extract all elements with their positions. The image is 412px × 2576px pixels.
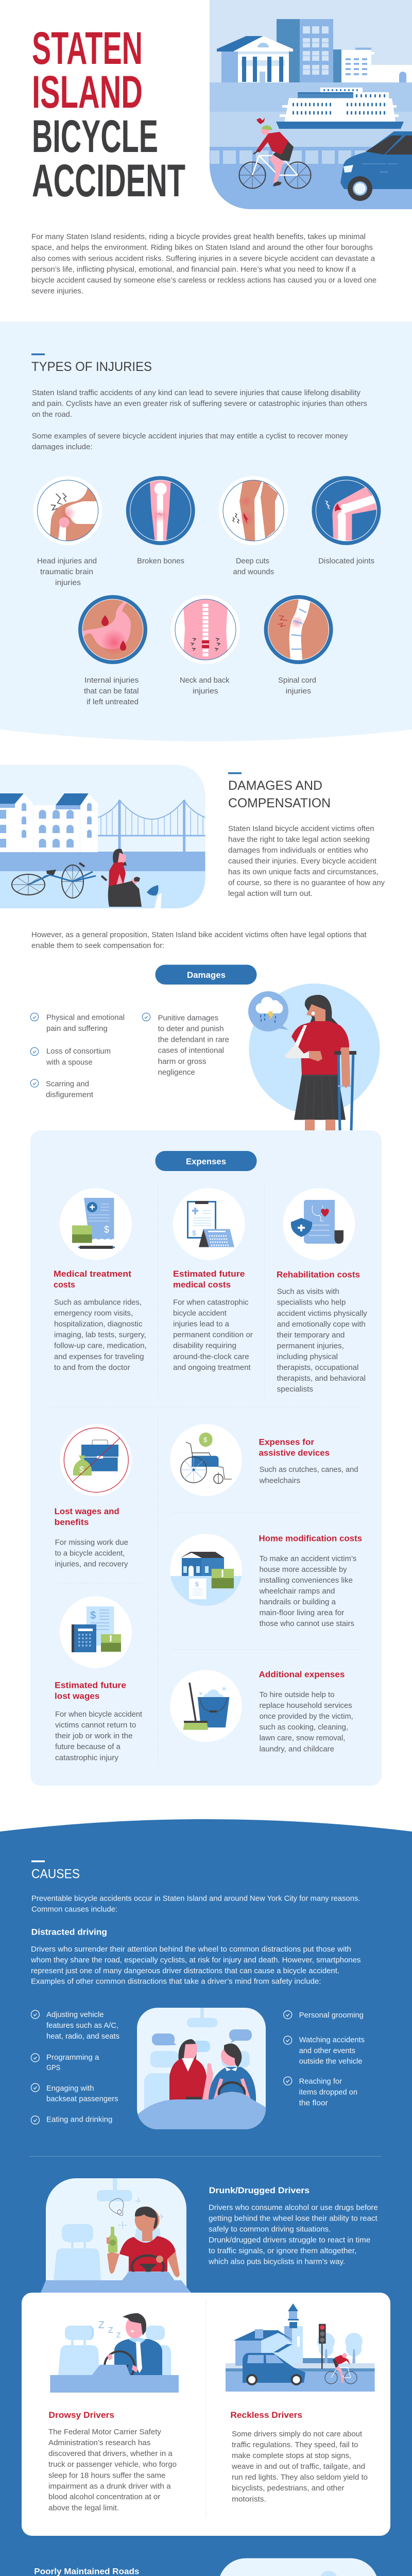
illustration: distracted car interior [137,2008,266,2129]
text block: distracted driving: Distracted driving [31,1927,107,1937]
panel: expenses [30,1130,382,1786]
text block: reckless drivers [230,2410,368,2503]
text block: drowsy drivers: Administration’s research has [48,2438,150,2447]
text: expenses for assistive devices [259,1437,358,1485]
heading: types of injuries [31,353,152,374]
labels: first row: and wounds [233,568,274,577]
text: medical treatment costs: to and from the doctor [54,1363,130,1372]
labels: first row [37,556,374,587]
text block: drunk/drugged drivers: getting behind the wheel lose their ability to react [209,2214,378,2223]
text: additional expenses: once provided by the victim, [260,1712,353,1721]
title: STATEN [32,22,143,74]
text: expenses for assistive devices: assistive devices [259,1448,330,1458]
list: damages left column: Loss of consortium [46,1047,111,1056]
text: lost wages and benefits: benefits [55,1517,89,1527]
list: damages right column: to deter and punish [158,1025,224,1033]
text block: distracted driving: Examples of other common distractions that take a driver’s mind from safety include: [31,1977,321,1986]
heading: damages and compensation [228,772,331,810]
icon: clipboard and calendar: $ [192,1229,196,1237]
text block: damages intro: Staten Island bicycle accident victims often [228,824,374,833]
list: distractions right [284,2011,365,2107]
text: home modification costs: wheelchair ramps and [259,1587,335,1596]
intro paragraph: also comes with serious accident risks. Suffering injuries in a severe bicycle accident can devastate a [31,255,375,263]
intro paragraph [31,232,376,296]
icon: broken bones [126,476,195,545]
text block: damages intro: damages from individuals or entities who [228,846,368,855]
text block: drowsy drivers: sleep for 18 hours suffer the same [48,2471,165,2480]
text: medical treatment costs: Such as ambulance rides, [54,1298,142,1307]
list: damages right column: the defendant in rare [158,1036,229,1044]
zzz: Z [108,2326,113,2335]
illustration: reckless driving street scene [226,2303,375,2392]
icon: trees [317,2333,363,2363]
hero illustration: city, ferry, cyclist and car [210,0,412,209]
list: distractions left: GPS [46,2063,60,2072]
icon: thought bubble with storm cloud [248,991,288,1031]
heading: causes: CAUSES [31,1867,80,1882]
text block: drunk/drugged drivers: Drivers who consume alcohol or use drugs before [209,2203,378,2212]
text block: causes intro [31,1894,360,1913]
text block: drunk/drugged drivers: to traffic signals, or ignore them altogether, [209,2246,356,2255]
list: damages right column: Punitive damages [158,1014,218,1022]
text: estimated future medical costs: For when catastrophic [173,1298,249,1307]
text block: drunk/drugged drivers [208,2185,378,2266]
icon: cyclist [239,117,311,189]
text: estimated future lost wages [55,1681,143,1762]
icon: head injury [33,476,104,547]
list: damages left column [30,1013,125,1099]
icon: spinal cord [264,595,333,664]
zzz [98,2320,121,2339]
icon: tower [277,19,341,82]
text: additional expenses: replace household services [260,1701,352,1710]
text block: drunk/drugged drivers: which also puts bicyclists in harm’s way. [208,2258,345,2266]
text: home modification costs [259,1533,362,1628]
text block: causes intro: Common causes include: [31,1905,117,1913]
heading: causes [31,1860,80,1882]
text: rehabilitation costs: Such as visits with [277,1287,339,1296]
panel: causes [0,1819,412,2576]
list: damages left column: with a spouse [46,1058,93,1066]
title: ACCIDENT [32,155,185,206]
list: damages left column: disfigurement [46,1091,94,1099]
text: rehabilitation costs: specialists who help [277,1298,346,1307]
icon: medical bill [60,1188,132,1260]
text block: injuries intro: damages include: [32,443,93,451]
text: lost wages and benefits: to a bicycle accident, [55,1549,125,1558]
pill: expenses: Expenses [186,1157,226,1166]
icon: rehabilitation report and shield [283,1188,355,1260]
labels: first row: traumatic brain [40,568,93,577]
list: damages right column: harm or gross [158,1057,207,1066]
intro paragraph: For many Staten Island residents, riding a bicycle provides great health benefits, takes up minimal [31,232,366,241]
text: home modification costs: main-floor living area for [260,1608,344,1617]
pill: expenses [156,1151,256,1171]
text: home modification costs: those who cannot use stairs [260,1619,354,1628]
icon: church tower and house [233,2303,303,2366]
text: rehabilitation costs: therapists, occupational [277,1363,358,1372]
icon: small blue car [243,2353,305,2385]
intro paragraph: space, and helps the environment. Riding bikes on Staten Island and around the other four boroughs [31,243,373,252]
text block: drowsy drivers: blood alcohol concentration at or [48,2493,160,2501]
text block: causes intro: Preventable bicycle accidents occur in Staten Island and around New York City for many reasons. [31,1894,360,1903]
text block: reckless drivers: Some drivers simply do not care about [232,2430,363,2438]
icon: tree [320,2571,337,2576]
icon: dislocated joints [312,476,381,545]
list: distractions right: items dropped on [299,2088,357,2097]
text block: reckless drivers: motorists. [232,2495,266,2503]
text block: drowsy drivers: Drowsy Drivers [48,2410,114,2420]
text: estimated future medical costs: injuries lead to a [173,1320,230,1328]
text: rehabilitation costs: their temporary and [277,1331,345,1340]
text: estimated future lost wages: lost wages [55,1691,99,1701]
text block: injuries intro: and pain. Cyclists have an even greater risk of suffering severe or catastrophic injuries than others [32,399,367,408]
labels: first row: Broken bones [137,556,184,566]
icon: driver [209,2043,256,2102]
text: expenses for assistive devices: Expenses for [259,1437,314,1447]
text: additional expenses: To hire outside help to [260,1690,335,1699]
text: estimated future medical costs: permanent condition or [173,1331,253,1340]
icon: blue car [340,131,412,201]
text: estimated future lost wages: Estimated future [55,1681,126,1690]
text block: drowsy drivers: above the legal limit. [48,2503,119,2512]
text block: distracted driving: represent just one of many dangerous driver distractions that can cause a bicycle accident. [31,1967,339,1975]
text: estimated future lost wages: For when bicycle accident [55,1710,143,1719]
text: expenses for assistive devices: Such as crutches, canes, and [260,1465,358,1474]
text: lost wages and benefits [55,1506,128,1569]
text: medical treatment costs: Medical treatment [54,1269,131,1279]
heading: damages and compensation: COMPENSATION [228,796,331,810]
icon: traffic light [319,2324,326,2369]
text block: drowsy drivers [48,2410,177,2512]
labels: second row [84,676,316,706]
text: additional expenses: lawn care, snow removal, [260,1734,345,1742]
list: distractions left: backseat passengers [46,2095,118,2103]
text: expenses for assistive devices: wheelchairs [259,1476,300,1485]
text: medical treatment costs: imaging, lab tests, surgery, [54,1331,146,1340]
title: BICYCLE [32,110,158,162]
text block: damages intro: legal action will turn out. [228,889,313,898]
text: estimated future lost wages: their job or work in the [55,1732,133,1740]
icon: suspension bridge [98,800,205,852]
list: damages left column: Physical and emotional [46,1013,125,1022]
text block: reckless drivers: make complete stops at stop signs, [232,2451,351,2460]
icon: passenger [169,2039,213,2100]
text: lost wages and benefits: For missing work due [55,1538,128,1547]
text: rehabilitation costs: permanent injuries, [277,1342,344,1350]
list: distractions left: Programming a [46,2053,99,2062]
text block: drowsy drivers: discovered that drivers, whether in a [48,2449,173,2458]
text: medical treatment costs: and expenses for traveling [54,1352,144,1361]
list: damages right column [142,1013,229,1077]
labels: first row: Head injuries and [37,556,97,566]
icon: lost wages: $ [79,1465,84,1475]
text: home modification costs: handrails or building a [260,1598,336,1606]
text: estimated future medical costs: bicycle accident [173,1309,227,1317]
text block: distracted driving [30,1927,360,1986]
icon: home modification: $ [195,1581,199,1588]
text block: reckless drivers: Reckless Drivers [230,2410,302,2420]
intro paragraph: person’s life, inflicting physical, emotional, and financial pain. Here’s what you need to know if a [31,265,356,274]
text block: damages intro: has its own unique facts and circumstances, [228,868,379,876]
text: rehabilitation costs: specialists [277,1385,313,1394]
text: estimated future medical costs: medical costs [173,1280,231,1290]
list: distractions left: Eating and drinking [46,2115,112,2124]
text: rehabilitation costs: including physical [277,1352,338,1361]
icon: calculator and paperwork: $ [90,1610,96,1621]
text: rehabilitation costs: Rehabilitation costs [277,1269,360,1280]
zzz: Z [116,2331,121,2339]
heading: damages and compensation: DAMAGES AND [228,778,322,793]
panel: drowsy and reckless drivers card [22,2293,390,2536]
text block: drowsy drivers: impairment as a drunk driver with a [48,2482,171,2490]
list: distractions left: Engaging with [46,2084,94,2093]
text block: injuries intro: Some examples of severe bicycle accident injuries that may entitle a cyclist to recover money [32,432,348,440]
icon: internal injuries [78,595,147,664]
list: damages left column: Scarring and [46,1080,89,1088]
zzz: Z [98,2320,105,2331]
icon: clipboard and calendar [173,1188,245,1260]
text block: injuries intro [32,388,367,451]
intro paragraph: severe injuries. [31,287,83,296]
list: distractions right: and other events [299,2046,355,2055]
icon: ferry [276,88,404,129]
icon: drunk driver figure [107,2207,180,2278]
text: rehabilitation costs: accident victims physically [277,1309,367,1318]
icon: white buildings [0,793,98,852]
text: home modification costs: house more accessible by [260,1565,347,1574]
list: distractions left: features such as A/C, [46,2021,118,2030]
text block: damages intro: have the right to take legal action seeking [228,835,370,844]
text block: drowsy drivers: truck or passenger vehicle, who forgo [48,2460,177,2469]
labels: second row: injuries [286,687,311,696]
labels: second row: injuries [193,687,218,696]
icon: courthouse [217,36,293,82]
list: distractions left: Adjusting vehicle [46,2010,104,2019]
pill: damages [156,964,256,985]
text: estimated future lost wages: future because of a [55,1742,121,1751]
list: distractions right: Reaching for [299,2077,342,2086]
text: medical treatment costs [54,1269,147,1372]
text block: distracted driving: whom they share the road, especially cyclists, at risk for injury and death. However, smartphones [30,1956,360,1964]
text block: drunk/drugged drivers: safely to common driving situations. [209,2225,331,2234]
damages illustration: bridge, buildings and injured cyclist [0,765,205,908]
text block: distracted driving: Drivers who surrender their attention behind the wheel to common distractions put those with [31,1945,351,1954]
labels: second row: Internal injuries [84,676,139,685]
list: damages left column: pain and suffering [46,1024,108,1033]
text block: damages intro [228,824,385,898]
text: estimated future medical costs: around-the-clock care [173,1352,249,1361]
text: home modification costs: To make an accident victim’s [260,1554,356,1563]
text: medical treatment costs: hospitalization, diagnostic [54,1320,143,1328]
text: lost wages and benefits: Lost wages and [55,1506,119,1516]
icon: wheelchair: $ [203,1436,208,1444]
icon: wheelchair [170,1424,242,1496]
illustration: drowsy driver [50,2313,179,2393]
text: rehabilitation costs: and emotionally cope with [277,1320,366,1329]
text: additional expenses: such as cooking, cleaning, [260,1723,348,1732]
illustration: poorly maintained road [218,2558,379,2576]
text block: legal options: enable them to seek compensation for: [31,941,164,950]
text block: drowsy drivers: The Federal Motor Carrier Safety [48,2428,161,2436]
list: damages right column: cases of intentional [158,1046,224,1055]
list: damages right column: negligence [158,1068,195,1077]
list: distractions right: the floor [299,2098,328,2107]
labels: second row: Neck and back [180,676,230,685]
text: home modification costs: installing conveniences like [260,1576,353,1585]
text block: drunk/drugged drivers: Drunk/drugged drivers struggle to react in time [209,2235,370,2244]
icon: injured woman on crutch [248,984,380,1130]
text: medical treatment costs: costs [54,1280,75,1290]
text: estimated future medical costs: Estimated future [173,1269,245,1279]
icon: medical bill: $ [104,1225,109,1235]
icon: white office buildings [341,47,412,82]
text: medical treatment costs: emergency room visits, [54,1309,133,1317]
text block: reckless drivers: bicyclists, pedestrians, and other [232,2484,344,2493]
text: estimated future medical costs [173,1269,253,1372]
labels: second row: that can be fatal [84,687,139,696]
text: rehabilitation costs: therapists, and behavioral [277,1374,366,1383]
text: lost wages and benefits: injuries, and recovery [55,1560,128,1569]
icon: neck and back [171,595,240,664]
text block: damages intro: caused their injuries. Every bicycle accident [228,857,377,866]
labels: first row: Deep cuts [236,556,269,566]
panel: types of injuries [0,321,412,741]
title: ISLAND [32,66,143,117]
text: additional expenses [259,1669,353,1754]
text block: drunk/drugged drivers: Drunk/Drugged Drivers [209,2185,310,2195]
text block: legal options [31,930,367,950]
list: distractions left: heat, radio, and seats [46,2032,119,2041]
labels: first row: injuries [55,579,81,587]
list: distractions right: Personal grooming [299,2011,364,2020]
list: distractions left [31,2010,119,2124]
illustration: drunk driver [41,2178,191,2293]
labels: second row: Spinal cord [278,676,316,685]
text: estimated future medical costs: disability requiring [173,1342,236,1350]
text: additional expenses: laundry, and childcare [260,1744,334,1754]
icon: calculator and paperwork [60,1596,132,1668]
text: estimated future medical costs: and ongoing treatment [173,1363,251,1372]
icon: deep cuts [219,476,288,545]
pill: damages: Damages [187,970,226,980]
text block: reckless drivers: weave in and out of traffic, tailgate, and [231,2462,365,2471]
text: estimated future lost wages: victims cannot return to [55,1721,136,1730]
list: distractions right: Watching accidents [299,2036,365,2044]
text block: reckless drivers: run red lights. They also seldom yield to [232,2473,368,2482]
text block: damages intro: of course, so there is no guarantee of how any [228,878,385,887]
text block: injuries intro: on the road. [32,410,72,419]
list: distractions right: outside the vehicle [299,2057,363,2066]
text block: legal options: However, as a general proposition, Staten Island bike accident victims often have legal options that [31,930,367,939]
intro paragraph: bicycle accident caused by someone else’s careless or reckless actions has caused you or a loved one [31,276,376,285]
text: rehabilitation costs [277,1269,367,1394]
icon: bucket and broom [170,1670,242,1742]
icon: speech bubbles [152,2029,252,2045]
text: medical treatment costs: follow-up care, medication, [54,1342,147,1350]
text block: reckless drivers: traffic regulations. They speed, fail to [232,2441,358,2449]
text: additional expenses: Additional expenses [259,1669,345,1680]
icon: small cyclist [325,2353,357,2384]
text block: injuries intro: Staten Island traffic accidents of any kind can lead to severe injuries that cause lifelong disability [32,388,360,397]
icon: fallen bicycle [12,863,107,898]
text: estimated future lost wages: catastrophic injury [55,1754,119,1762]
icon: seated woman [108,849,162,908]
icon: lost wages [60,1424,132,1496]
labels: second row: if left untreated [87,698,139,706]
icon: drowsy driver figure [105,2313,162,2381]
title [32,22,185,206]
labels: first row: Dislocated joints [318,556,374,566]
text: home modification costs: Home modification costs [259,1533,362,1543]
icon: home modification [170,1534,242,1607]
heading: types of injuries: TYPES OF INJURIES [31,360,152,374]
